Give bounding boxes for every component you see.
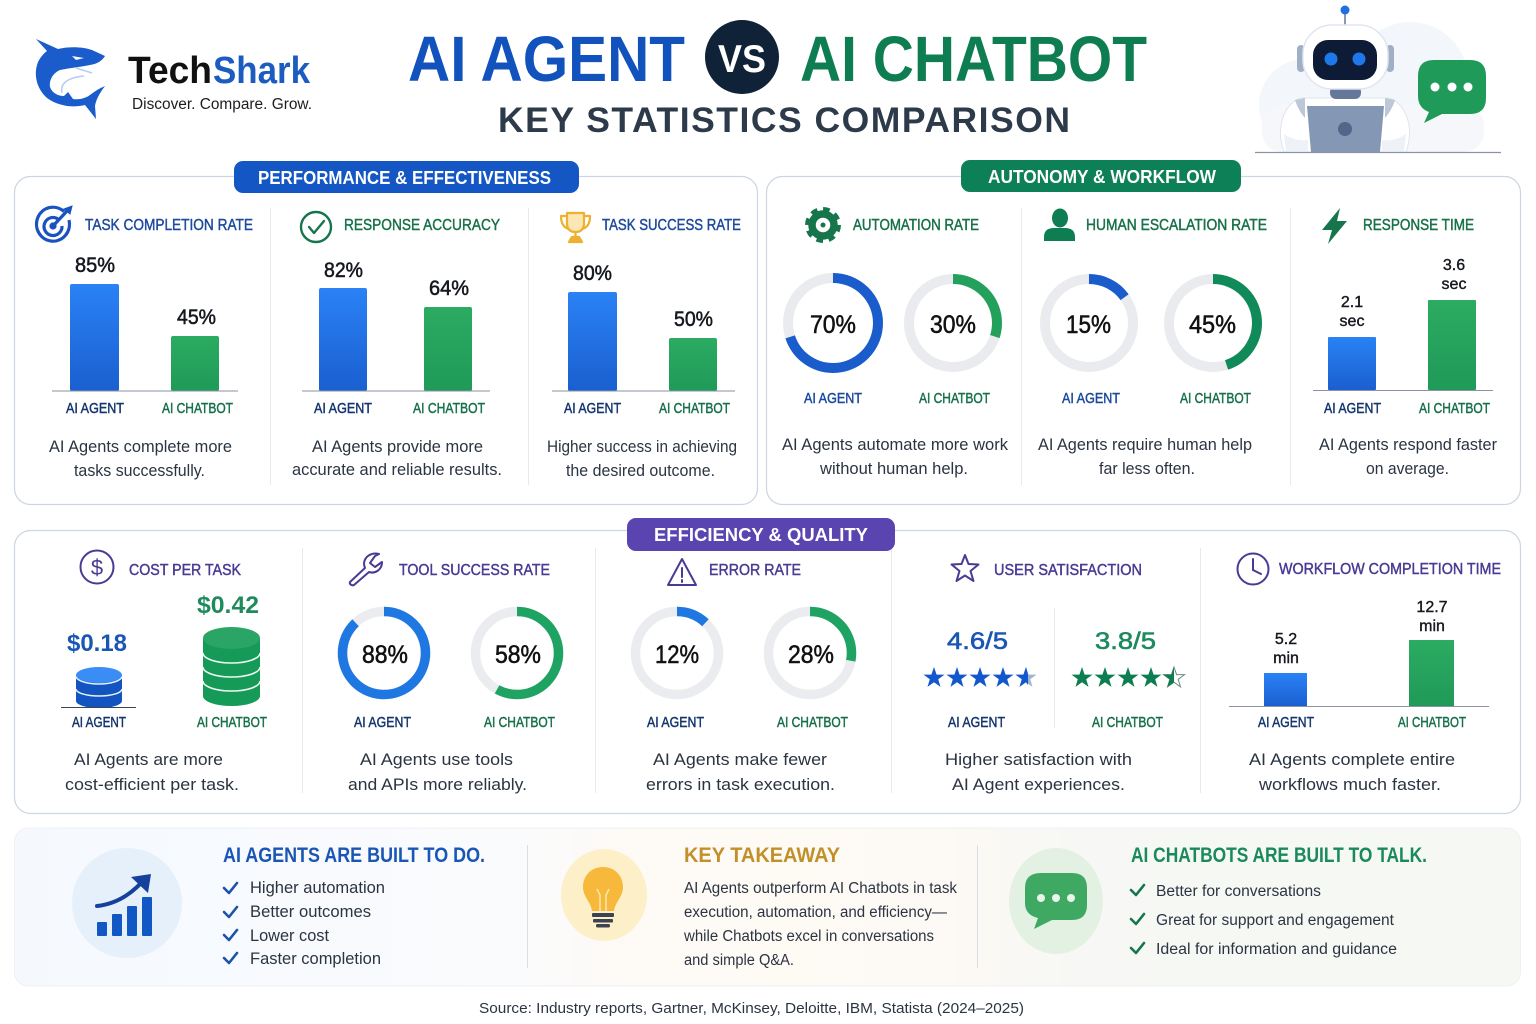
bar chart — [52, 254, 238, 417]
takeaway text: execution, automation, and efficiency— — [684, 904, 947, 921]
rating: chatbot 3.8/5: AI CHATBOT — [1092, 715, 1163, 731]
donut chart: agent 15% — [1045, 279, 1133, 407]
metric: workflow completion time — [1229, 554, 1501, 794]
icon: clock — [1238, 554, 1268, 584]
heading: TASK SUCCESS RATE — [602, 217, 741, 234]
bar chart: sec — [1442, 276, 1466, 293]
icon: shark — [36, 39, 105, 119]
illustration: robot with chat bubble — [1255, 6, 1501, 152]
check list: Lower cost — [250, 927, 329, 945]
donut chart: agent 88% — [342, 612, 426, 731]
bar chart: AI AGENT — [66, 401, 124, 417]
description — [49, 438, 232, 480]
heading: AI CHATBOTS ARE BUILT TO TALK. — [1131, 844, 1427, 867]
icon: dollar: $ — [91, 555, 103, 580]
description: AI Agents complete entire — [1249, 751, 1455, 769]
summary: key takeaway — [561, 844, 957, 969]
bar chart: AI AGENT — [314, 401, 372, 417]
donut chart: chatbot 58% — [476, 612, 558, 731]
donut chart: agent 12% — [636, 612, 718, 731]
bar chart: min — [1273, 650, 1299, 667]
heading: HUMAN ESCALATION RATE — [1086, 217, 1267, 234]
description: AI Agents respond faster — [1319, 436, 1497, 454]
heading: TOOL SUCCESS RATE — [399, 562, 550, 579]
description — [1319, 436, 1497, 478]
description — [1249, 751, 1455, 794]
bar chart: 45% — [177, 306, 216, 329]
description — [945, 751, 1132, 794]
icon: growth chart — [72, 848, 182, 958]
heading: WORKFLOW COMPLETION TIME — [1279, 561, 1501, 578]
description: AI Agents are more — [74, 751, 223, 769]
bar chart: min — [1419, 618, 1445, 635]
donut chart: chatbot 28%: 28% — [788, 641, 834, 669]
metric: user satisfaction — [924, 555, 1184, 794]
description: cost-efficient per task. — [65, 776, 239, 794]
bar chart: AI CHATBOT — [1398, 715, 1466, 731]
panel: efficiency and quality — [14, 518, 1520, 814]
rating: agent 4.6/5 — [924, 628, 1036, 731]
bar chart: 3.6 — [1443, 257, 1465, 274]
donut chart: chatbot 58%: 58% — [495, 641, 541, 669]
logo wordmark — [128, 50, 311, 92]
rating: chatbot 3.8/5 — [1072, 628, 1184, 731]
metric: error rate — [636, 559, 852, 794]
takeaway text: while Chatbots excel in conversations — [683, 928, 934, 945]
description: accurate and reliable results. — [292, 461, 502, 479]
donut chart: chatbot 45% — [1169, 279, 1257, 407]
bar chart — [1313, 257, 1493, 417]
heading: KEY TAKEAWAY — [684, 844, 840, 867]
icon: dollar — [80, 550, 114, 584]
icon: target — [37, 206, 72, 241]
section pill: efficiency: EFFICIENCY & QUALITY — [654, 525, 868, 545]
donut chart: chatbot 28%: AI CHATBOT — [777, 715, 848, 731]
donut chart: agent 88%: 88% — [362, 641, 408, 669]
bar chart: 82% — [324, 259, 363, 282]
rating: agent 4.6/5: 4.6/5 — [947, 628, 1008, 655]
metric: response accuracy — [292, 212, 502, 479]
takeaway text: AI Agents outperform AI Chatbots in task — [684, 880, 957, 897]
value: agent cost stack: AI AGENT — [72, 715, 126, 731]
description: without human help. — [819, 460, 968, 478]
value: agent cost stack — [61, 630, 136, 731]
donut chart: chatbot 45%: 45% — [1189, 311, 1236, 339]
description — [348, 751, 527, 794]
section pill: performance — [234, 161, 579, 193]
description: AI Agents require human help — [1038, 436, 1252, 454]
title: AI Chatbot: AI CHATBOT — [800, 23, 1147, 95]
description: AI Agents use tools — [360, 751, 513, 769]
icon: person — [1044, 208, 1075, 241]
donut chart: agent 88%: AI AGENT — [354, 715, 411, 731]
heading: USER SATISFACTION — [994, 562, 1142, 579]
check list — [1131, 883, 1397, 958]
donut chart: chatbot 30%: 30% — [930, 311, 976, 339]
icon: VS badge — [705, 20, 779, 94]
logo tagline: Discover. Compare. Grow. — [132, 96, 312, 113]
icon: chat bubble — [1009, 848, 1103, 954]
panel: autonomy and workflow — [766, 160, 1520, 504]
description — [292, 438, 502, 479]
heading: RESPONSE TIME — [1363, 217, 1474, 234]
summary: agents built to do — [72, 844, 485, 968]
bar chart: 64% — [429, 277, 469, 300]
section pill: performance: PERFORMANCE & EFFECTIVENESS — [258, 168, 551, 188]
description: Higher success in achieving — [547, 438, 737, 456]
check list: Higher automation — [250, 879, 385, 897]
heading: ERROR RATE — [709, 562, 801, 579]
donut chart: agent 70% — [788, 278, 878, 407]
source note: Source: Industry reports, Gartner, McKinsey, Deloitte, IBM, Statista (2024–2025) — [479, 1000, 1024, 1017]
icon: gear — [808, 210, 838, 240]
bar chart: AI AGENT — [564, 401, 621, 417]
icon: check circle — [301, 212, 331, 242]
bar chart: sec — [1340, 313, 1364, 330]
heading: AI AGENTS ARE BUILT TO DO. — [223, 844, 485, 867]
icon: VS badge: VS — [718, 38, 766, 81]
heading: RESPONSE ACCURACY — [344, 217, 500, 234]
description: AI Agents complete more — [49, 438, 232, 456]
description: errors in task execution. — [646, 776, 835, 794]
section pill: autonomy — [961, 160, 1241, 192]
section pill: autonomy: AUTONOMY & WORKFLOW — [988, 167, 1216, 187]
bar chart — [302, 259, 490, 417]
heading: TASK COMPLETION RATE — [85, 217, 253, 234]
panel: bottom summary — [14, 828, 1520, 986]
donut chart: chatbot 30% — [909, 279, 997, 407]
bar chart: AI CHATBOT — [659, 401, 730, 417]
check list: Better for conversations — [1156, 883, 1321, 900]
description — [65, 751, 239, 794]
rating: agent 4.6/5: AI AGENT — [948, 715, 1005, 731]
description: tasks successfully. — [74, 462, 205, 480]
check list: Ideal for information and guidance — [1156, 941, 1397, 958]
donut chart: agent 70%: AI AGENT — [804, 391, 862, 407]
value: chatbot cost stack: $0.42 — [197, 592, 259, 619]
description — [547, 438, 737, 480]
value: chatbot cost stack: AI CHATBOT — [197, 715, 267, 731]
metric: task completion rate — [37, 206, 253, 480]
description — [1038, 436, 1252, 478]
title: AI Agent: AI AGENT — [408, 23, 685, 95]
logo wordmark: Tech — [128, 50, 212, 92]
icon: light bulb — [561, 849, 647, 941]
heading: COST PER TASK — [129, 562, 242, 579]
subtitle: KEY STATISTICS COMPARISON — [498, 100, 1070, 140]
description: workflows much faster. — [1258, 776, 1441, 794]
rating: chatbot 3.8/5: 3.8/5 — [1095, 628, 1156, 655]
check list — [224, 879, 385, 968]
description: and APIs more reliably. — [348, 776, 527, 794]
bar chart: 12.7 — [1416, 599, 1448, 616]
metric: automation rate — [782, 210, 1009, 478]
donut chart: agent 70%: 70% — [810, 311, 856, 339]
header logo: TechShark — [36, 39, 312, 119]
donut chart: agent 15%: AI AGENT — [1062, 391, 1120, 407]
bar chart: 2.1 — [1341, 294, 1363, 311]
description: AI Agent experiences. — [952, 776, 1125, 794]
value: chatbot cost stack — [197, 592, 267, 731]
bar chart: AI CHATBOT — [1419, 401, 1490, 417]
panel: performance and effectiveness — [14, 161, 758, 504]
logo wordmark: Shark — [213, 50, 311, 92]
donut chart: chatbot 45%: AI CHATBOT — [1180, 391, 1251, 407]
description: on average. — [1366, 460, 1449, 478]
description: AI Agents provide more — [312, 438, 483, 456]
description — [646, 751, 835, 794]
metric: response time — [1313, 208, 1497, 478]
bar chart: AI CHATBOT — [162, 401, 233, 417]
takeaway text — [683, 880, 957, 969]
description: AI Agents automate more work — [782, 436, 1009, 454]
bar chart: 85% — [75, 254, 115, 277]
description: Higher satisfaction with — [945, 751, 1132, 769]
check list: Faster completion — [250, 950, 381, 968]
check list: Great for support and engagement — [1156, 912, 1395, 929]
title — [408, 20, 1147, 140]
icon: warning triangle — [668, 559, 696, 585]
donut chart: chatbot 30%: AI CHATBOT — [919, 391, 990, 407]
description: far less often. — [1099, 460, 1195, 478]
metric: human escalation rate — [1038, 208, 1267, 478]
metric: task success rate — [547, 213, 741, 480]
metric: cost per task — [61, 550, 267, 794]
bar chart — [552, 262, 735, 417]
icon: wrench — [350, 553, 382, 585]
donut chart: chatbot 28% — [768, 612, 852, 731]
description — [782, 436, 1009, 478]
description: the desired outcome. — [566, 462, 715, 480]
bar chart: AI AGENT — [1258, 715, 1314, 731]
icon: star outline — [952, 555, 978, 581]
heading: AUTOMATION RATE — [853, 217, 979, 234]
bar chart — [1229, 599, 1489, 731]
metric: tool success rate — [342, 553, 558, 794]
bar chart: 50% — [674, 308, 713, 331]
summary: chatbots built to talk — [1009, 844, 1427, 958]
description: AI Agents make fewer — [653, 751, 828, 769]
icon: lightning bolt — [1322, 208, 1347, 244]
bar chart: 5.2 — [1275, 631, 1297, 648]
section pill: efficiency — [627, 518, 895, 551]
donut chart: chatbot 58%: AI CHATBOT — [484, 715, 555, 731]
bar chart: AI CHATBOT — [413, 401, 485, 417]
icon: trophy — [561, 213, 590, 242]
takeaway text: and simple Q&A. — [684, 952, 794, 969]
bar chart: AI AGENT — [1324, 401, 1381, 417]
bar chart: 80% — [573, 262, 612, 285]
check list: Better outcomes — [250, 903, 371, 921]
value: agent cost stack: $0.18 — [67, 630, 127, 657]
donut chart: agent 12%: AI AGENT — [647, 715, 704, 731]
donut chart: agent 15%: 15% — [1066, 311, 1111, 339]
donut chart: agent 12%: 12% — [655, 641, 699, 669]
